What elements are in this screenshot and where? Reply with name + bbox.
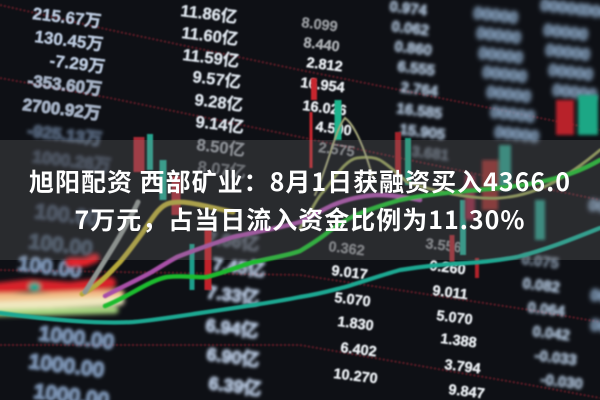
column: price values: 10.270 bbox=[333, 366, 378, 387]
column: blurred values: -0.030 bbox=[540, 371, 584, 393]
column: far right blurred values: 00000 bbox=[545, 42, 591, 64]
column: values in yi: 11.86亿 bbox=[180, 1, 238, 27]
column: price values: 2.575 bbox=[318, 140, 355, 160]
column: values in yi: 9.14亿 bbox=[195, 112, 245, 137]
column: price values: 16.954 bbox=[300, 75, 345, 96]
column: price values: 8.099 bbox=[301, 15, 338, 35]
column: far right blurred values: 00000 bbox=[552, 82, 598, 104]
column: price values: 3.794 bbox=[444, 357, 481, 377]
column: blurred yi values: 7.45亿 bbox=[212, 254, 267, 280]
column: values in yi bbox=[180, 1, 247, 182]
column: far right blurred values: 00000 bbox=[473, 5, 519, 27]
column: price values: 8.440 bbox=[303, 35, 340, 55]
column: values in wan: 130.45万 bbox=[34, 27, 104, 54]
column: blurred values: 2.764 bbox=[400, 79, 439, 101]
column: values in yi: 9.57亿 bbox=[192, 67, 242, 92]
column: price values bbox=[300, 15, 485, 400]
column: far right blurred values: 00000 bbox=[543, 22, 589, 44]
column: blurred yi values: 7.33亿 bbox=[206, 282, 261, 308]
column: blurred yi values bbox=[205, 228, 267, 399]
column: values in wan bbox=[22, 4, 106, 124]
title: 旭阳配资 西部矿业：8月1日获融资买入4366.0 bbox=[29, 163, 571, 199]
candlesticks bbox=[139, 78, 588, 290]
column: price values: 9.017 bbox=[331, 263, 368, 283]
column: price values: 0.362 bbox=[328, 239, 365, 259]
column: blurred lower values: -925.13万 bbox=[27, 121, 103, 149]
column: blurred values: 0.082 bbox=[522, 275, 561, 297]
column: blurred values: 0.075 bbox=[521, 251, 560, 273]
column: price values: 4.500 bbox=[315, 119, 352, 139]
column: blurred yi values: 6.39亿 bbox=[208, 373, 263, 399]
column: far right blurred values bbox=[473, 0, 600, 336]
column: values in wan: -353.60万 bbox=[27, 71, 103, 99]
column: blurred lower values: 1000.26万 bbox=[32, 147, 112, 176]
column: far right blurred values: 00000 bbox=[548, 62, 594, 84]
column: far right blurred values: 00000 bbox=[478, 45, 524, 67]
column: far right blurred values: 00000 bbox=[490, 104, 536, 126]
column: price values: 9.011 bbox=[432, 283, 469, 303]
column: price values: 5.070 bbox=[334, 290, 371, 310]
column: blurred values: 6.555 bbox=[397, 58, 436, 80]
column: price values: 16.026 bbox=[302, 98, 347, 119]
title bbox=[29, 163, 571, 237]
column: blurred lower values: 100.00 bbox=[16, 252, 83, 283]
column: blurred lower values: 100.00 bbox=[27, 230, 94, 261]
title: 7万元，占当日流入资金比例为11.30% bbox=[75, 201, 525, 237]
column: price values: 6.402 bbox=[340, 340, 377, 360]
column: blurred values: 3.681 bbox=[411, 143, 450, 165]
column: far right blurred values: 00000 bbox=[482, 64, 528, 86]
column: price values: 1.830 bbox=[337, 314, 374, 334]
column: blurred lower values bbox=[16, 121, 116, 400]
column: values in yi: 9.28亿 bbox=[194, 90, 244, 115]
column: blurred lower values: 1000.00 bbox=[37, 322, 116, 354]
column: values in yi: 11.60亿 bbox=[181, 23, 239, 49]
column: far right blurred values: 00000 bbox=[494, 124, 540, 146]
column: blurred values: 15.905 bbox=[399, 121, 446, 144]
column: price values: 2.812 bbox=[306, 55, 343, 75]
column: blurred lower values: 100.00 bbox=[33, 200, 100, 231]
column: values in wan: 2700.92万 bbox=[22, 95, 102, 124]
column: blurred values: 0.062 bbox=[391, 18, 430, 40]
column: price values: 3.556 bbox=[425, 236, 462, 256]
column: values in yi: 11.59亿 bbox=[182, 45, 240, 71]
column: blurred yi values: 7.66亿 bbox=[206, 228, 261, 254]
column: blurred lower values: 1000.00 bbox=[27, 350, 106, 382]
column: values in wan: 215.67万 bbox=[32, 4, 102, 31]
moving average lines bbox=[0, 118, 600, 323]
column: blurred yi values: 6.90亿 bbox=[206, 344, 261, 370]
column: blurred yi values: 6.94亿 bbox=[205, 315, 260, 341]
column: values in wan: -7.29万 bbox=[49, 51, 106, 77]
column: blurred values: 0.860 bbox=[394, 38, 433, 60]
column: blurred values: 0.064 bbox=[527, 299, 566, 321]
column: far right blurred values: 00000 bbox=[486, 84, 532, 106]
column: price values: 5.070 bbox=[436, 308, 473, 328]
column: blurred values: -0.033 bbox=[534, 347, 578, 369]
column: price values: 1.388 bbox=[440, 331, 477, 351]
column: far right blurred values: 00000 bbox=[476, 25, 522, 47]
column: blurred values: 0.042 bbox=[532, 323, 571, 345]
column: blurred values: 16.585 bbox=[396, 100, 443, 123]
column: values in yi: 8.50亿 bbox=[196, 135, 246, 160]
translucent title band bbox=[0, 140, 600, 260]
column: values in yi: 8.07亿 bbox=[197, 157, 247, 182]
column: blurred values bbox=[389, 0, 584, 393]
column: price values: 0.260 bbox=[429, 258, 466, 278]
